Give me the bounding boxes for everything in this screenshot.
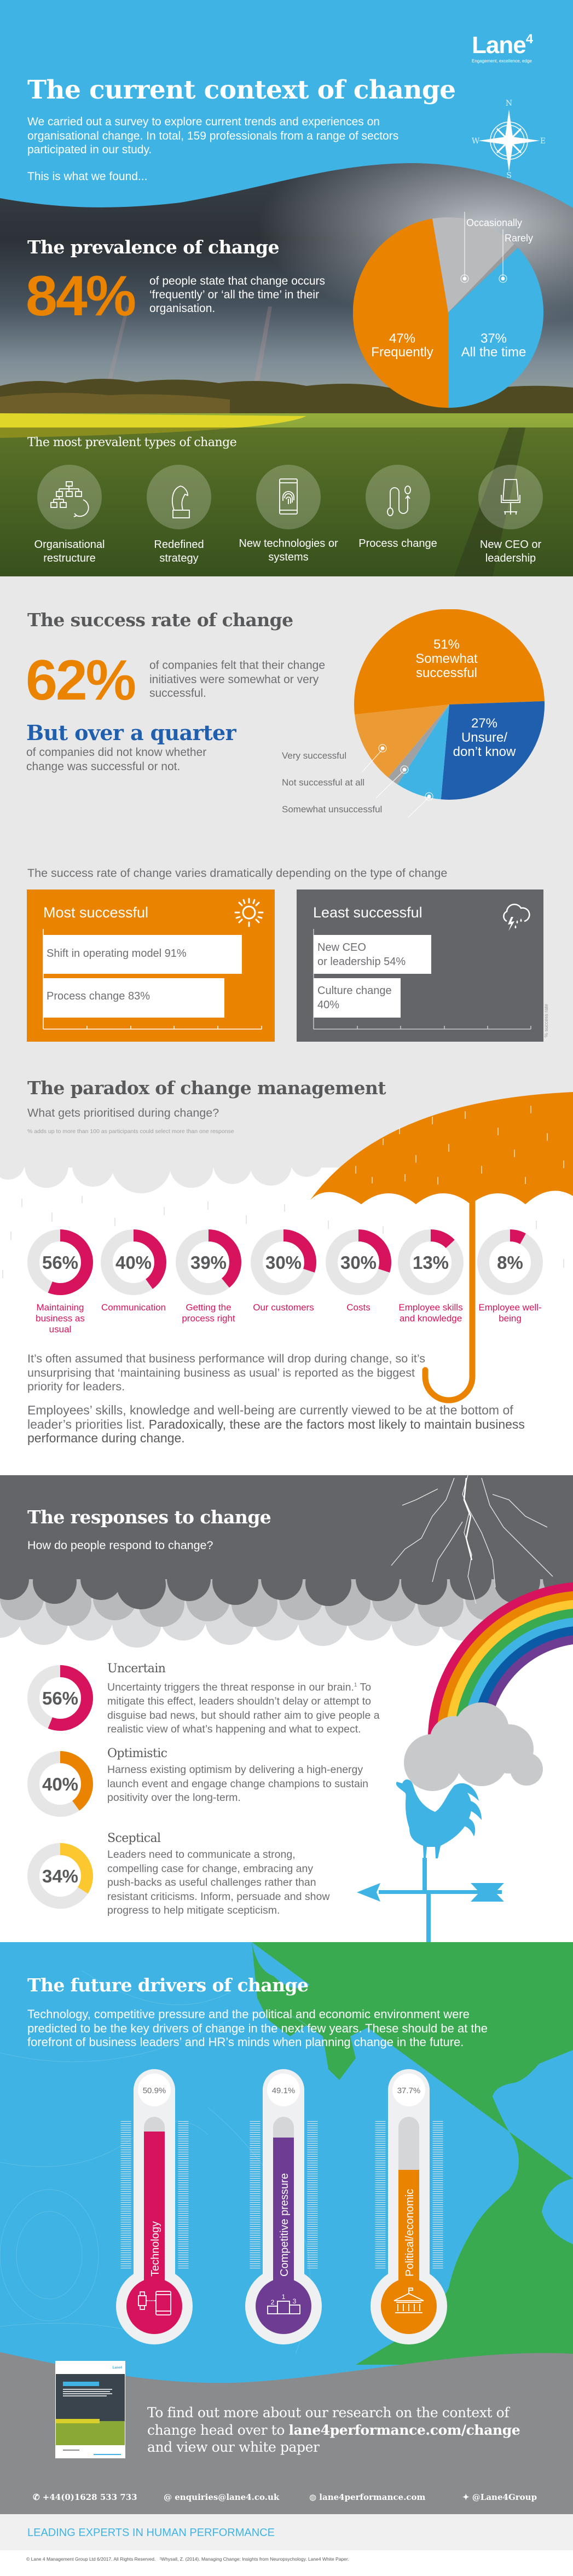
logo: Engagement, excellence, edge	[472, 59, 532, 63]
icon: compass	[472, 99, 546, 178]
icon: storm cloud	[503, 903, 530, 931]
donut charts: priorities	[27, 1229, 543, 1295]
thermometer: technology: Technology	[149, 2221, 161, 2277]
heading: most successful: Most successful	[43, 904, 148, 921]
pie chart: success rate: Somewhat	[415, 651, 478, 666]
labels: priorities: Employee well-being	[478, 1302, 542, 1324]
donut charts: priorities: 13%	[413, 1252, 449, 1273]
heading: most prevalent types: The most prevalent types of change	[27, 436, 236, 449]
thermometer: technology	[116, 2069, 193, 2344]
pie chart: success rate: 27%	[471, 716, 497, 731]
donut charts: responses: 56%	[42, 1688, 78, 1708]
icon: phone fingerprint	[280, 479, 297, 514]
donut charts: priorities: 30%	[265, 1252, 302, 1273]
heading: least successful: Least successful	[313, 904, 422, 921]
bar label: culture: Culture change	[317, 985, 392, 997]
umbrella canopy	[310, 1092, 573, 1204]
labels: types of change	[34, 538, 541, 564]
pie chart: success rate: Unsure/	[461, 730, 507, 745]
bar chart: least successful	[313, 929, 531, 1030]
title: The current context of change	[27, 75, 455, 105]
intro text: We carried out a survey to explore current trends and experiences on organisational change. In total, 159 professionals from a range of sectors participated in our study.	[27, 115, 398, 156]
bar label: culture	[317, 985, 392, 1011]
white paper booklet	[55, 2361, 125, 2458]
heading: prevalence: The prevalence of change	[27, 236, 279, 258]
intro: found: This is what we found...	[27, 170, 147, 183]
pie chart: prevalence: 47%	[389, 331, 415, 346]
thermometer: competitive pressure: 49.1%	[272, 2086, 295, 2095]
background: success and paradox section	[0, 576, 573, 1193]
thermometer: competitive pressure	[245, 2069, 322, 2344]
labels: priorities: Getting the process right	[182, 1302, 235, 1324]
pie chart: prevalence: Rarely	[505, 233, 533, 244]
bar label: shift: Shift in operating model 91%	[47, 948, 187, 960]
donut charts: priorities: 40%	[115, 1252, 152, 1273]
donut charts: responses: 40%	[42, 1774, 78, 1794]
thermometer: competitive pressure: 2	[271, 2298, 275, 2306]
pie chart: success rate: Very successful	[282, 750, 346, 761]
heading: future drivers: The future drivers of change	[27, 1974, 308, 1996]
thermometer: technology: 50.9%	[143, 2086, 166, 2095]
response: uncertain: Uncertainty triggers the threat response in our brain.1 To mitigate this effect, leaders shouldn’t delay or attempt to disguise bad news, but should rather aim to give people a realistic view of what’s happening and what to expect.	[107, 1682, 380, 1735]
icon: sun	[234, 898, 264, 927]
pie chart: prevalence: Occasionally	[466, 217, 522, 228]
donut charts: responses	[27, 1665, 93, 1909]
contact details: @ enquiries@lane4.co.uk	[164, 2492, 279, 2502]
thermometers	[116, 2069, 447, 2344]
background: responses clouds	[0, 1475, 573, 1648]
thermometer: competitive pressure: 1	[282, 2293, 286, 2301]
labels: priorities: Maintaining business as usual	[36, 1302, 85, 1335]
labels: priorities: Our customers	[253, 1302, 314, 1313]
stat: 84%: 84%	[26, 264, 135, 328]
subheading: what gets prioritised: What gets prioritised during change?	[27, 1106, 219, 1119]
rainbow, cloud and weathervane	[357, 1582, 573, 1942]
icon: compass: N	[506, 99, 512, 108]
heading: responses: The responses to change	[27, 1506, 271, 1528]
labels: types of change: Process change	[358, 538, 437, 550]
pie chart: success rate: Not successful at all	[282, 777, 364, 788]
pie chart: prevalence: All the time	[461, 345, 526, 360]
donut charts: priorities: 39%	[190, 1252, 227, 1273]
pie chart: success rate: successful	[416, 666, 477, 680]
note: percentages: % adds up to more than 100 as participants could select more than one response	[27, 1128, 234, 1135]
stat: 62%: 62%	[26, 649, 135, 712]
bar label: process: Process change 83%	[47, 990, 150, 1002]
bar label: new CEO	[317, 942, 406, 968]
contact details: ✆ +44(0)1628 533 733	[33, 2492, 137, 2502]
response: optimistic: Harness existing optimism by delivering a high-energy launch event and engage change champions to sustain positivity over the long-term.	[107, 1764, 368, 1804]
response: sceptical: Sceptical	[107, 1832, 160, 1845]
donut charts: priorities: 56%	[42, 1252, 78, 1273]
contact details: ✦ @Lane4Group	[462, 2492, 537, 2502]
contact details	[33, 2492, 537, 2502]
weathervane rooster	[357, 1780, 504, 1943]
tagline strip	[0, 2514, 573, 2550]
labels: types of change: New CEO or leadership	[480, 539, 541, 564]
icon: org chart	[51, 482, 89, 517]
labels: types of change: New technologies or systems	[239, 538, 338, 563]
call to action: To find out more about our research on the context of change head over to lane4performance.com/change and view our white paper	[147, 2405, 520, 2455]
tagline strip: LEADING EXPERTS IN HUMAN PERFORMANCE	[27, 2527, 275, 2539]
text: paradox paragraph 2: Employees’ skills, knowledge and well-being are currently viewed to be at the bottom of leader’s priorities list. Paradoxically, these are the factors most likely to maintain business performance during change.	[27, 1403, 525, 1445]
pie chart: success rate: 51%	[433, 637, 460, 652]
bar label: culture: 40%	[317, 999, 339, 1011]
text: 84% description: of people state that change occurs ‘frequently’ or ‘all the time’ in their organisation.	[149, 275, 325, 315]
pie chart: success rate: Somewhat unsuccessful	[282, 804, 382, 815]
icon: compass: E	[540, 137, 546, 146]
text: 62% description: of companies felt that their change initiatives were somewhat or very successful.	[149, 659, 325, 700]
icon: compass: W	[472, 137, 480, 146]
donut charts: responses: 34%	[42, 1866, 78, 1886]
thermometer: political/economic: 37.7%	[397, 2086, 420, 2095]
icon: chess knight	[172, 486, 189, 518]
pie chart: prevalence: 37%	[481, 331, 507, 346]
lightning	[391, 1475, 553, 1604]
response: uncertain: Uncertain	[107, 1662, 165, 1676]
subheading: how do people respond: How do people respond to change?	[27, 1539, 213, 1552]
heading: success rate: The success rate of change	[27, 609, 293, 631]
pie chart: success rate	[282, 609, 545, 817]
bar label: new CEO: or leadership 54%	[317, 956, 406, 968]
icons: types of change	[37, 465, 543, 529]
text: paradox paragraph 1: It’s often assumed that business performance will drop during change, so it’s unsurprising that ‘maintaining business as usual’ is reported as the biggest priority for leaders.	[27, 1352, 425, 1393]
thermometer: political/economic: Political/economic	[404, 2189, 416, 2277]
panel: most successful	[27, 890, 275, 1042]
text: success varies: The success rate of change varies dramatically depending on the type of change	[27, 867, 447, 880]
white paper booklet: Lane4	[113, 2366, 123, 2370]
bar label: new CEO: New CEO	[317, 942, 366, 954]
copyright footnote: © Lane 4 Management Group Ltd 6/2017. All Rights Reserved. ¹Whysall, Z. (2014). Managing Change: Insights from Neuropsychology. Lane4 White Paper.	[26, 2556, 349, 2562]
cloud	[404, 1702, 543, 1791]
text: quarter description: of companies did not know whether change was successful or not.	[26, 746, 206, 773]
pie chart: prevalence: Frequently	[371, 345, 433, 360]
pie chart: success rate: don’t know	[453, 744, 516, 759]
pie chart: prevalence	[353, 212, 544, 408]
icon: chair	[501, 480, 520, 515]
thermometer: competitive pressure: 3	[293, 2297, 297, 2305]
thermometer: competitive pressure: Competitive pressure	[279, 2173, 291, 2277]
umbrella with rain	[2, 1092, 573, 1403]
rainbow	[432, 1586, 573, 1741]
labels: priorities: Employee skills and knowledge	[398, 1302, 463, 1324]
heading: but over a quarter: But over a quarter	[26, 720, 236, 745]
labels: types of change: Redefined strategy	[154, 539, 204, 564]
heading: paradox: The paradox of change management	[27, 1077, 386, 1099]
donut charts: priorities: 30%	[340, 1252, 377, 1273]
panel: least successful	[297, 890, 543, 1042]
contact details: ◍ lane4performance.com	[309, 2492, 425, 2502]
labels: priorities	[36, 1302, 542, 1335]
umbrella handle	[425, 1202, 472, 1400]
background: sky and photo section	[0, 0, 573, 576]
response: sceptical: Leaders need to communicate a strong, compelling case for change, embracing any push-backs as useful challenges rather than resistant criticisms. Inform, persuade and show progress to help mitigate scepticism.	[107, 1849, 329, 1916]
thermometer: political/economic	[371, 2069, 447, 2344]
donut charts: priorities: 8%	[497, 1252, 523, 1273]
labels: types of change: Organisational restructure	[34, 539, 105, 564]
response: optimistic: Optimistic	[107, 1747, 167, 1760]
logo: Lane4	[472, 32, 533, 59]
text: future drivers description: Technology, competitive pressure and the political and economic environment were predicted to be the key drivers of change in the next few years. These should be at the forefront of business leaders’ and HR’s minds when planning change in the future.	[27, 2007, 488, 2049]
labels: priorities: Communication	[101, 1302, 166, 1313]
icon: process	[387, 486, 410, 516]
labels: priorities: Costs	[346, 1302, 371, 1313]
background: map and footer	[0, 1942, 573, 2514]
footer grey wave	[0, 2352, 573, 2514]
bar chart: most successful	[43, 929, 262, 1030]
axis label: success rate: % success rate	[543, 1004, 549, 1037]
